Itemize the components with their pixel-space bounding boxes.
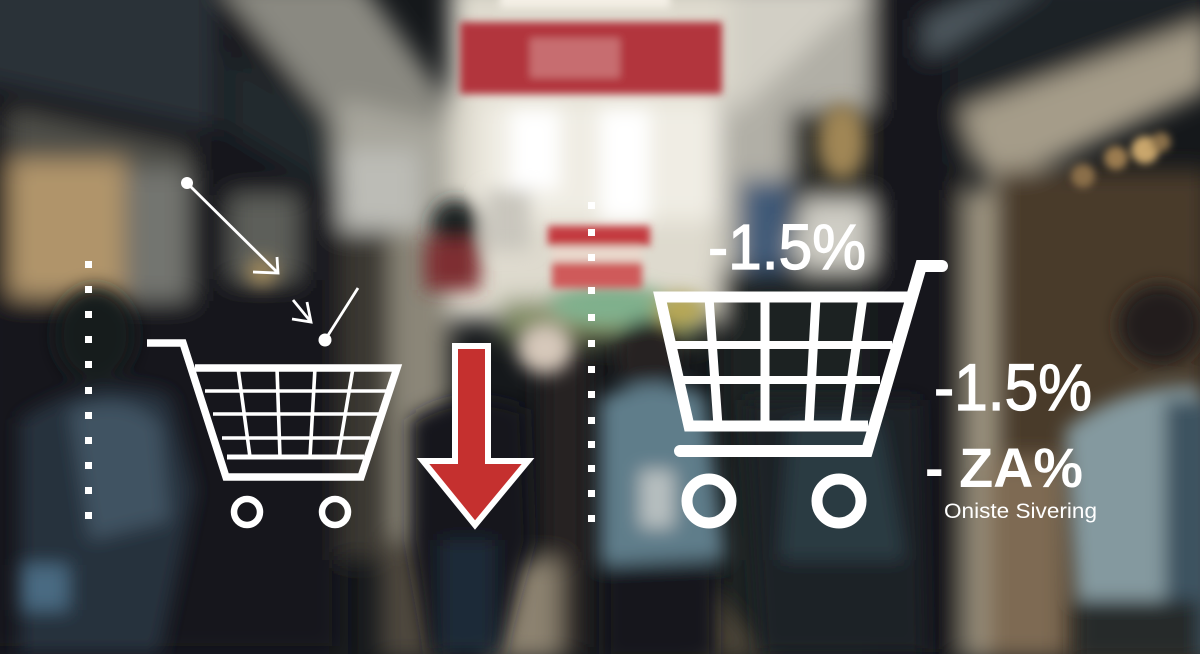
- stat: -ZA%: - ZA%: [925, 436, 1083, 499]
- icon: pin line: [318, 288, 358, 346]
- icon: long diagonal arrow: [181, 177, 278, 273]
- stat: top -1.5%: -1.5%: [708, 211, 866, 283]
- decorative people: [55, 287, 135, 383]
- dotted vertical line: left: [85, 261, 92, 519]
- icon: large shopping cart: [660, 266, 942, 523]
- icon: small arrow: [292, 300, 311, 322]
- icon: red down arrow: [423, 346, 528, 525]
- dotted vertical line: center: [588, 202, 595, 522]
- caption: Oniste Sivering: [944, 500, 1097, 523]
- stat: middle -1.5%: -1.5%: [934, 350, 1092, 424]
- icon: small shopping cart: [147, 343, 397, 525]
